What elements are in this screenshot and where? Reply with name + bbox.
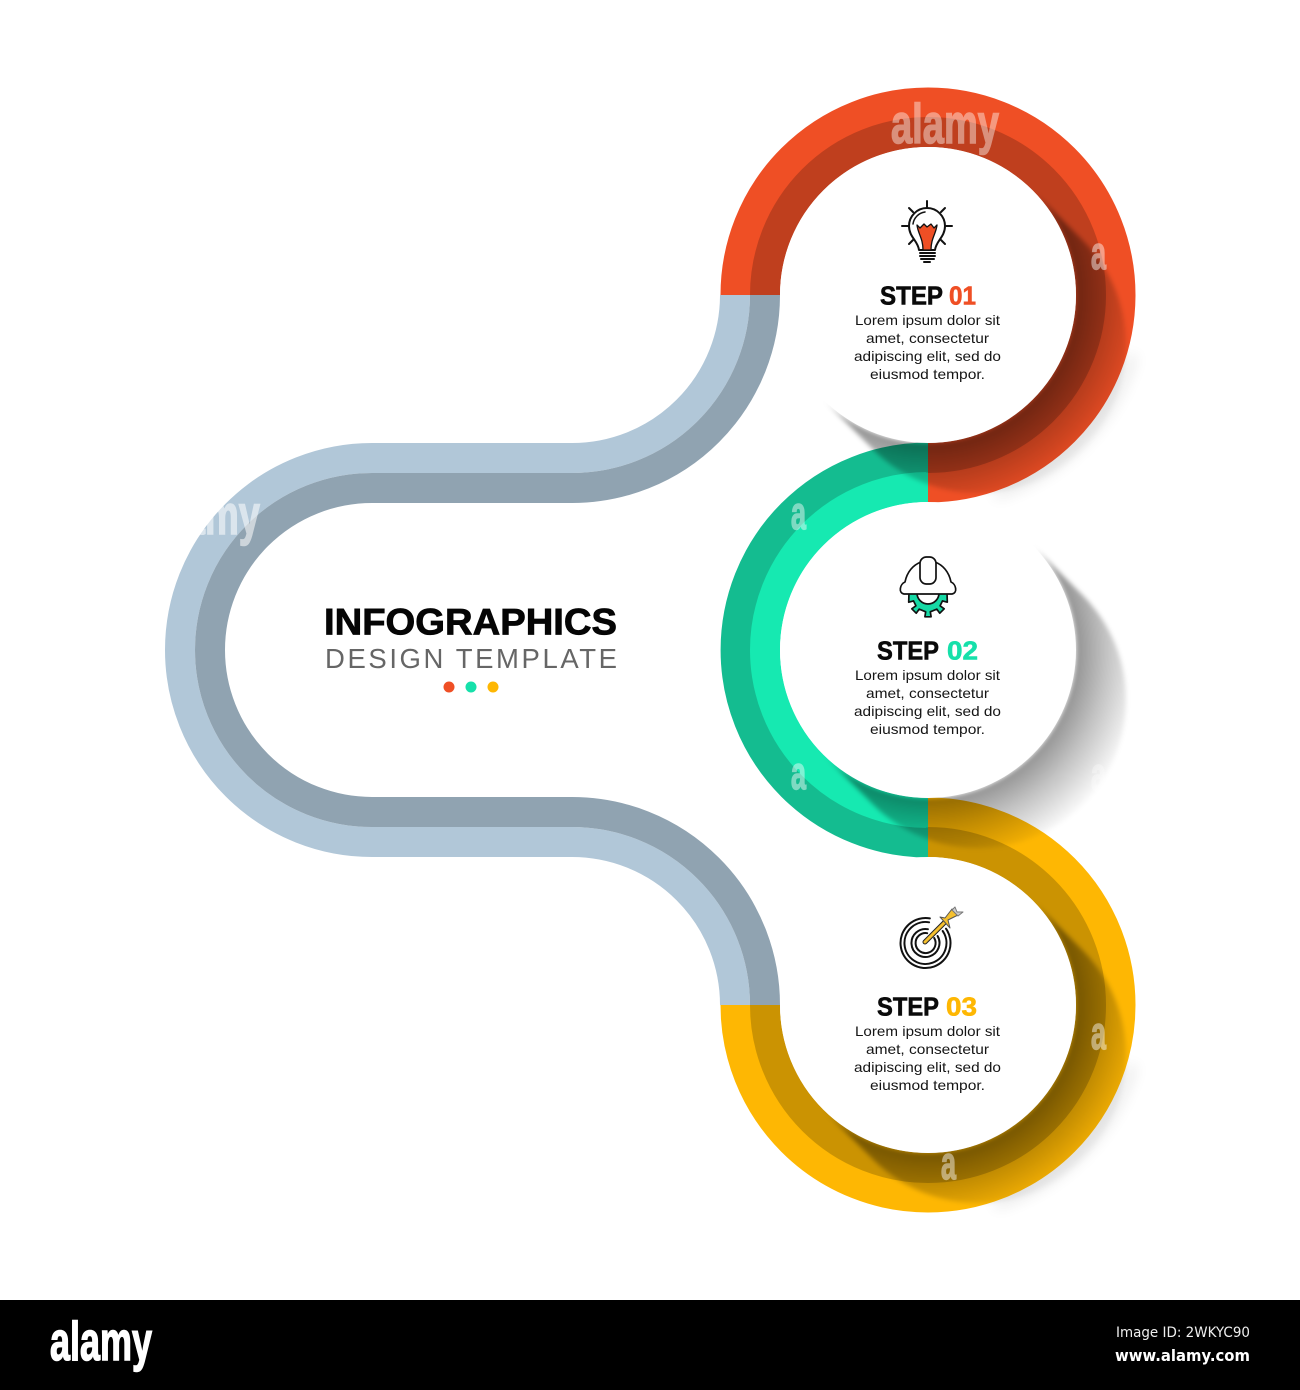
heading: step 01: STEP: [880, 280, 943, 310]
watermarks: a: [941, 1137, 956, 1189]
icon: light bulb: [902, 201, 952, 262]
watermarks: a: [1091, 748, 1106, 800]
white circle 3: [780, 857, 1076, 1153]
text: step 01 description: [854, 312, 1001, 382]
ring: step 01 red: [736, 103, 1120, 488]
watermarks: alamy: [891, 92, 999, 155]
text: step 02 description: adipiscing elit, sed do: [854, 703, 1001, 719]
ring: step 03 yellow: [736, 812, 1120, 1198]
watermarks: [152, 92, 1106, 1189]
heading: step 01: 01: [949, 280, 976, 310]
white circle 1: [780, 147, 1076, 443]
shadow: circle 1: [823, 190, 1126, 493]
watermarks: a: [791, 747, 806, 799]
title: DESIGN TEMPLATE: [325, 643, 617, 674]
text: step 02 description: Lorem ipsum dolor sit: [855, 667, 1000, 683]
white circle 2: [780, 502, 1076, 798]
text: step 03 description: [854, 1023, 1001, 1093]
ring: step 02 green: [736, 443, 929, 857]
heading: step 02: STEP: [877, 636, 939, 666]
text: step 03 description: amet, consectetur: [866, 1041, 989, 1057]
watermarks: alamy: [152, 483, 260, 546]
text: step 01 description: adipiscing elit, sed do: [854, 348, 1001, 364]
text: step 03 description: adipiscing elit, sed do: [854, 1059, 1001, 1075]
text: step 01 description: amet, consectetur: [866, 330, 989, 346]
footer url: www.alamy.com: [1115, 1346, 1250, 1365]
title dots: [444, 682, 498, 692]
icon: target with arrow: [901, 907, 963, 968]
shadow: circle 2: [823, 545, 1126, 848]
footer image id: Image ID: 2WKYC90: [1116, 1325, 1250, 1341]
heading: step 03: STEP: [877, 992, 939, 1022]
heading: step 03: [877, 992, 977, 1022]
shadow: circle 3: [823, 900, 1126, 1203]
text: step 01 description: Lorem ipsum dolor sit: [855, 312, 1000, 328]
text: step 01 description: eiusmod tempor.: [870, 366, 985, 382]
text: step 02 description: amet, consectetur: [866, 685, 989, 701]
title: INFOGRAPHICS: [324, 602, 617, 642]
watermarks: a: [1091, 227, 1106, 279]
text: step 02 description: eiusmod tempor.: [870, 721, 985, 737]
text: step 02 description: [854, 667, 1001, 737]
path: light band: [180, 295, 735, 1005]
icon: helmet with gear: [900, 557, 956, 617]
ring drop shadows on background: [995, 355, 1133, 1205]
watermarks: a: [1091, 1007, 1106, 1059]
title: [324, 602, 617, 674]
text: step 03 description: Lorem ipsum dolor sit: [855, 1023, 1000, 1039]
footer bar: [0, 1300, 1300, 1390]
heading: step 02: 02: [947, 636, 978, 666]
watermarks: a: [791, 487, 806, 539]
footer logo: alamy: [50, 1310, 152, 1372]
text: step 03 description: eiusmod tempor.: [870, 1077, 985, 1093]
grey connecting path: [180, 295, 765, 1005]
path: dark band: [210, 295, 765, 1005]
heading: step 02: [877, 636, 978, 666]
heading: step 03: 03: [946, 992, 977, 1022]
